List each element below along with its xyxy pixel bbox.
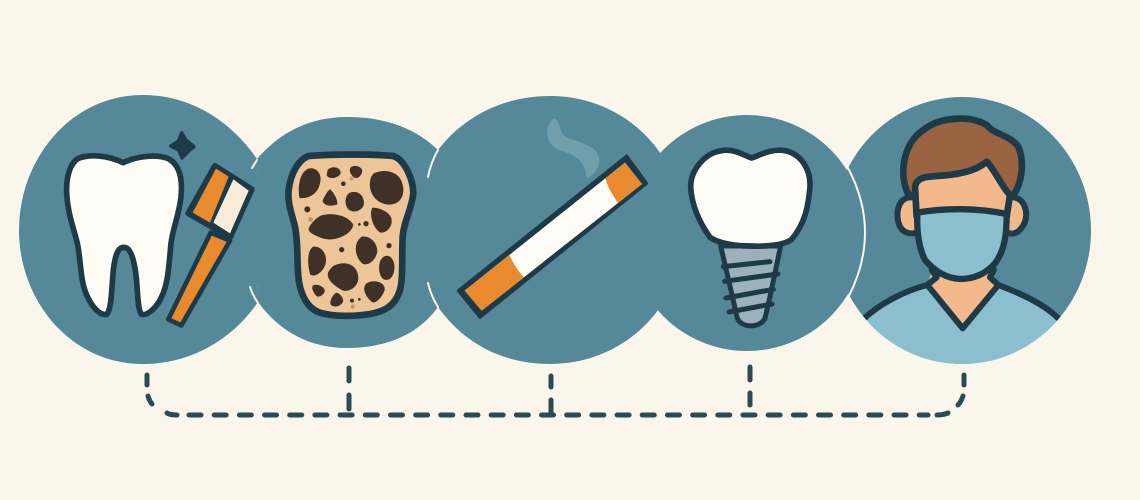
icon: masked clinician bbox=[857, 119, 1067, 380]
neck bbox=[929, 273, 995, 324]
scrubs bbox=[864, 288, 1058, 364]
implant screw bbox=[721, 246, 781, 326]
face bbox=[915, 162, 1010, 217]
icon: tooth bbox=[67, 156, 181, 315]
ears bbox=[897, 197, 922, 233]
hair bbox=[903, 119, 1022, 195]
bone pores bbox=[299, 167, 403, 306]
panel: teal circle backgrounds bbox=[19, 95, 1091, 364]
sparkle bbox=[171, 133, 194, 158]
icon: tooth and toothbrush bbox=[67, 133, 252, 325]
icon: dental implant bbox=[691, 150, 810, 326]
face mask bbox=[917, 209, 1007, 279]
circle junction highlights bbox=[250, 150, 865, 307]
cigarette body bbox=[458, 156, 647, 317]
icon: cigarette with smoke bbox=[458, 118, 647, 317]
smoke bbox=[547, 118, 599, 178]
dashed connector bbox=[147, 367, 964, 415]
icon: porous bone bbox=[288, 154, 413, 316]
implant crown bbox=[691, 150, 810, 246]
icon: toothbrush bbox=[168, 166, 252, 325]
